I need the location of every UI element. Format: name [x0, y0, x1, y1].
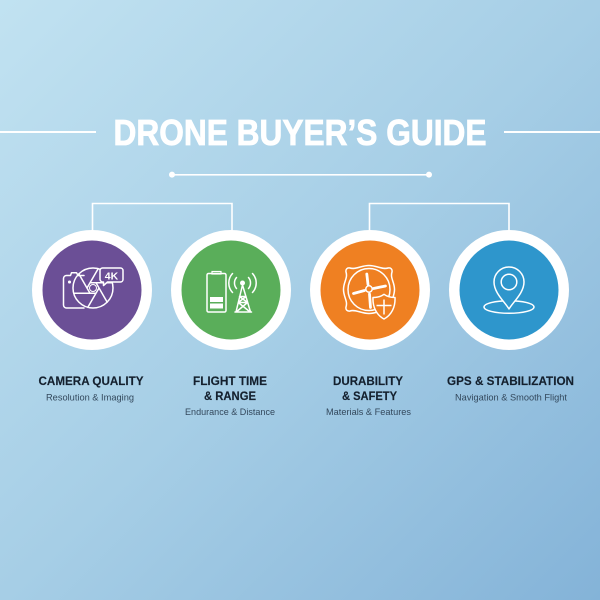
- label: durability and safety: & SAFETY: [342, 389, 397, 403]
- circle: flight time and range: [171, 230, 291, 350]
- label: flight time and range: & RANGE: [204, 389, 256, 403]
- label: GPS and stabilization: GPS & STABILIZATION: [447, 374, 574, 388]
- icon: shield with cross: [373, 294, 395, 319]
- icon: propeller blades: [354, 274, 386, 308]
- label: durability and safety: [326, 374, 411, 418]
- icon: propeller guard: [344, 266, 394, 314]
- label: camera quality: Resolution & Imaging: [46, 392, 134, 404]
- circle: camera quality: [32, 230, 152, 350]
- title side rule: left: [0, 131, 96, 133]
- circle: GPS and stabilization: [449, 230, 569, 350]
- label: flight time and range: [185, 374, 275, 418]
- label: flight time and range: FLIGHT TIME: [193, 374, 267, 388]
- label: GPS and stabilization: [447, 374, 574, 404]
- label: GPS and stabilization: Navigation & Smooth Flight: [455, 392, 567, 404]
- label: durability and safety: Materials & Features: [326, 407, 411, 418]
- icon: signal tower: [229, 274, 256, 312]
- title: DRONE BUYER’S GUIDE: [114, 112, 486, 153]
- badge label: 4K: [105, 270, 119, 282]
- icon: battery: [207, 272, 226, 312]
- icon: map pin on ring: [484, 267, 534, 313]
- label: durability and safety: DURABILITY: [333, 374, 403, 388]
- label: flight time and range: Endurance & Distance: [185, 407, 275, 418]
- circle: durability and safety: [310, 230, 430, 350]
- icon: camera with 4K badge: [64, 268, 123, 308]
- divider with end dots: [169, 172, 432, 178]
- label: camera quality: [38, 374, 144, 404]
- title side rule: right: [504, 131, 600, 133]
- connector: camera to flight time: [92, 204, 232, 231]
- label: camera quality: CAMERA QUALITY: [38, 374, 144, 388]
- connector: durability to GPS: [370, 204, 509, 231]
